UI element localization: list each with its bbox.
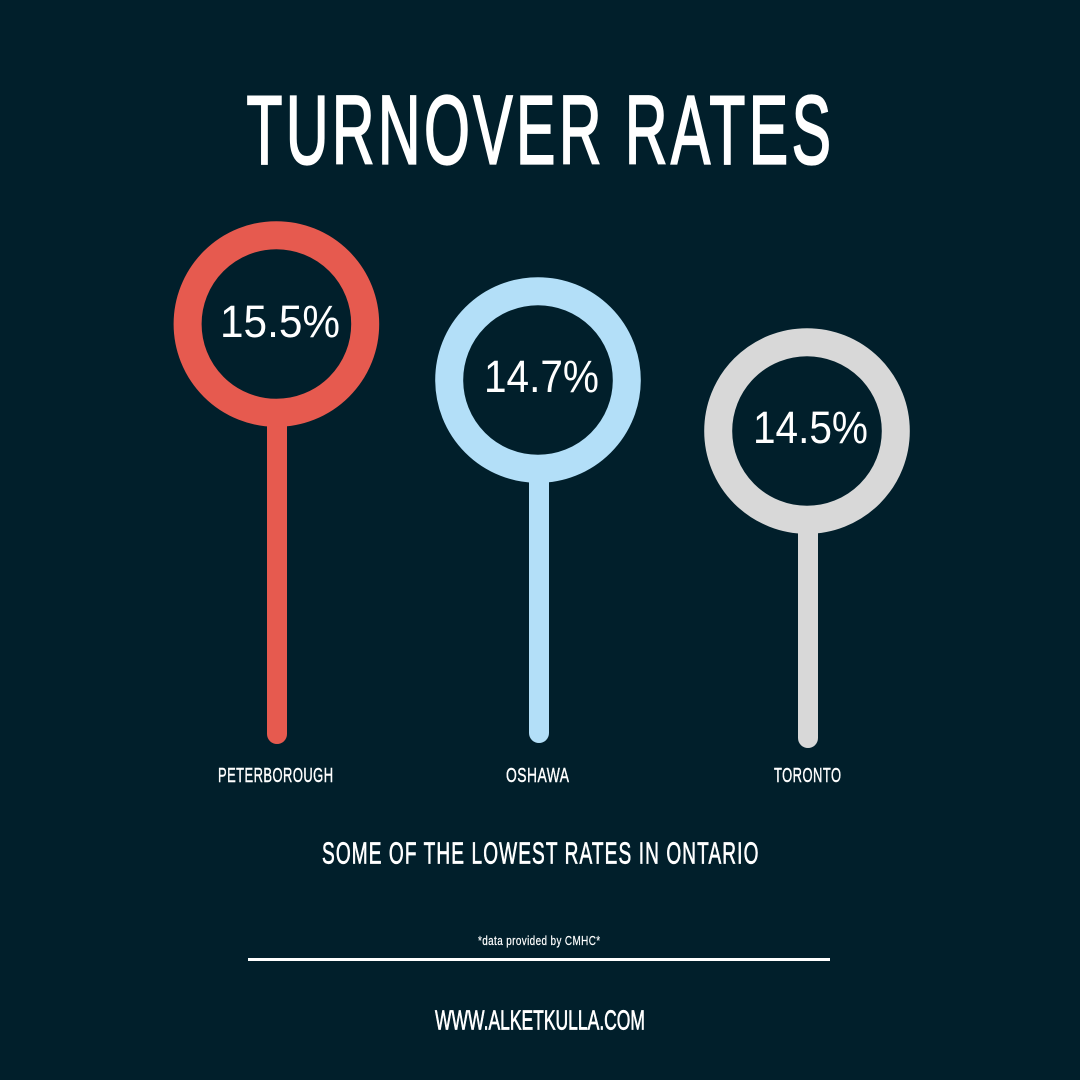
value: 15.5%: 15.5% (220, 296, 340, 347)
value: 14.5%: 14.5% (753, 402, 868, 453)
data source note: *data provided by CMHC* (478, 933, 600, 948)
subtitle: SOME OF THE LOWEST RATES IN ONTARIO (322, 836, 760, 871)
value: 14.7%: 14.7% (484, 351, 599, 402)
pin: Peterborough 15.5% (188, 235, 365, 787)
red pin stem (267, 415, 287, 744)
label: Toronto: TORONTO (774, 765, 842, 787)
pin: Oshawa 14.7% (449, 291, 627, 787)
website: WWW.ALKETKULLA.COM (435, 1005, 645, 1036)
grey pin ring (718, 342, 896, 520)
blue pin ring (449, 291, 627, 469)
label: Peterborough: PETERBOROUGH (218, 765, 334, 787)
pin: Toronto 14.5% (718, 342, 896, 787)
red pin ring (188, 235, 365, 413)
blue pin stem (529, 470, 549, 743)
grey pin stem (798, 520, 818, 748)
label: Oshawa: OSHAWA (506, 765, 570, 787)
